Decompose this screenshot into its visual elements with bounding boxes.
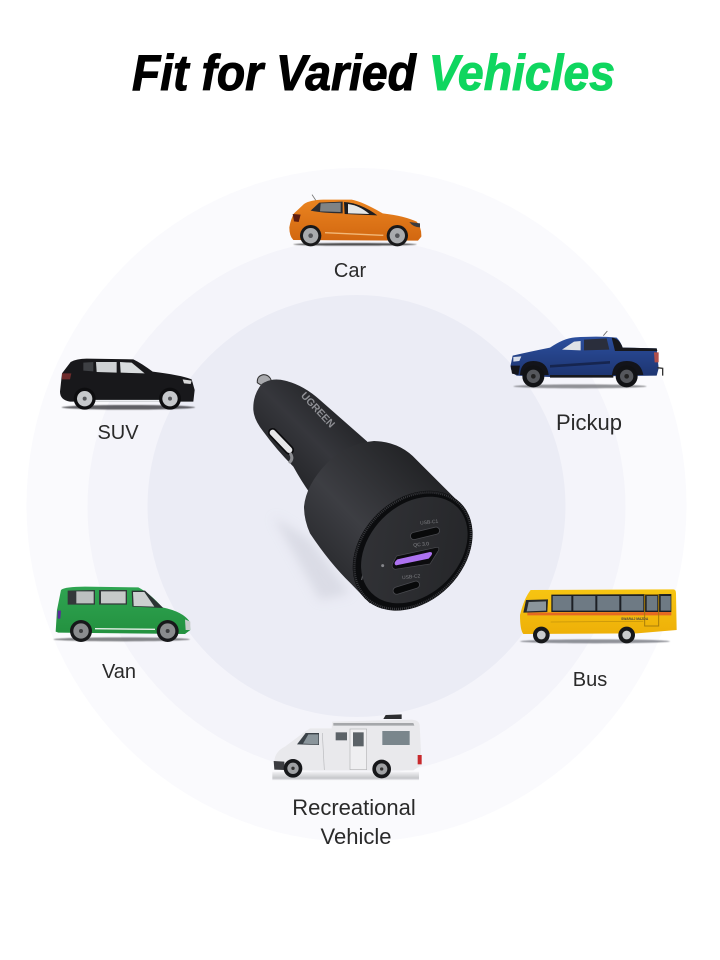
label: Recreational Vehicle: Recreational	[292, 795, 416, 820]
label: Recreational Vehicle: Vehicle	[321, 824, 391, 849]
bus body	[520, 589, 677, 634]
vehicle: bus	[520, 589, 677, 643]
charger barrel	[304, 441, 463, 603]
label: Bus: Bus	[573, 669, 607, 691]
QC label: QC 3.0	[413, 541, 430, 549]
metal tip	[257, 375, 271, 387]
vehicle: car	[289, 195, 421, 246]
brand name: UGREEN	[298, 391, 336, 430]
vehicle: pickup	[511, 331, 663, 388]
SUV body	[60, 359, 195, 402]
USB-C bottom label: USB-C2	[402, 573, 421, 581]
vehicle: SUV	[60, 359, 195, 410]
van body	[56, 587, 190, 634]
charger neck	[253, 380, 367, 493]
label: Pickup: Pickup	[556, 410, 622, 435]
concentric background circles	[26, 168, 686, 842]
charger shadow	[273, 517, 350, 600]
title: Fit for Varied Vehicles	[132, 45, 615, 101]
label: Van: Van	[102, 661, 136, 683]
car body	[289, 200, 421, 241]
label: Car: Car	[334, 260, 366, 282]
RV body	[274, 720, 422, 770]
USB-A purple tongue	[395, 552, 432, 565]
label: SUV: SUV	[97, 422, 139, 444]
USB-C top label: USB-C1	[420, 519, 439, 527]
front ring	[329, 467, 497, 635]
vehicle: bus: SWARAJ MAZDA	[621, 617, 649, 621]
vehicle: van	[53, 587, 190, 642]
pickup body	[511, 337, 659, 377]
side contact	[273, 433, 292, 462]
LED	[381, 564, 384, 567]
USB-A port	[392, 547, 439, 569]
USB-C top port	[414, 531, 436, 536]
car charger product	[253, 375, 497, 635]
USB-C bottom port	[397, 585, 416, 591]
front face	[340, 476, 489, 624]
vehicle: recreational vehicle	[272, 714, 422, 780]
